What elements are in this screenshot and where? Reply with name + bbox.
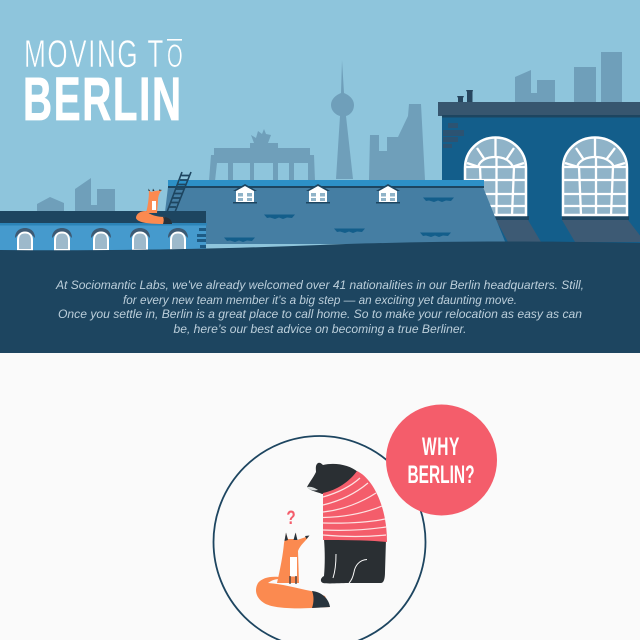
title line: moving to: MOVING T <box>24 32 165 75</box>
right skyline towers <box>515 52 622 103</box>
intro text <box>55 278 584 336</box>
left buildings silhouette <box>37 178 115 212</box>
bear legs <box>321 539 386 583</box>
panel: sky background <box>0 0 640 260</box>
building: left low block <box>0 211 207 252</box>
ladder <box>167 172 191 212</box>
intro text: At Sociomantic Labs, we've already welcomed over 41 nationalities in our Berlin headquarters. Still, <box>55 278 584 292</box>
window shadows <box>496 220 640 242</box>
title line: Berlin: BERLIN <box>23 65 183 133</box>
sweater <box>323 471 387 542</box>
panel: dark intro band <box>0 242 640 353</box>
chimneys <box>457 90 473 102</box>
roof water marks <box>224 198 454 242</box>
fox <box>256 532 330 608</box>
sweater stripes <box>323 478 386 536</box>
title <box>23 32 183 133</box>
bricks <box>197 228 206 248</box>
Brandenburg Gate silhouette <box>209 129 315 181</box>
arched window left <box>465 137 526 215</box>
skyline silhouettes <box>37 52 622 212</box>
dormer window 2 <box>306 184 330 204</box>
bear head <box>307 463 358 494</box>
intro text: Once you settle in, Berlin is a great place to call home. So to make your relocation as easy as can <box>58 307 582 321</box>
title line: moving to: O <box>167 38 183 74</box>
dormer window 1 <box>233 184 257 204</box>
angular tower silhouette <box>369 104 425 180</box>
dormer window 3 <box>376 184 400 204</box>
intro text: for every new team member it’s a big step — an exciting yet daunting move. <box>123 293 517 307</box>
TV tower silhouette <box>331 60 354 179</box>
small fox on roof <box>136 188 172 224</box>
arched window right <box>563 137 627 215</box>
fox tail <box>256 577 330 608</box>
fox body <box>277 533 309 583</box>
intro text: be, here’s our best advice on becoming a true Berliner. <box>174 322 466 336</box>
callout: why Berlin <box>386 404 497 516</box>
building: middle long block <box>160 180 506 244</box>
row of arched windows <box>15 228 188 250</box>
callout: why Berlin: BERLIN? <box>407 461 475 489</box>
callout: why Berlin: WHY <box>422 433 460 461</box>
question mark: ? <box>286 506 296 528</box>
circle outline <box>214 436 426 640</box>
wall bricks <box>443 123 464 148</box>
building: right warehouse <box>438 90 640 244</box>
bear in striped sweater <box>307 463 387 583</box>
